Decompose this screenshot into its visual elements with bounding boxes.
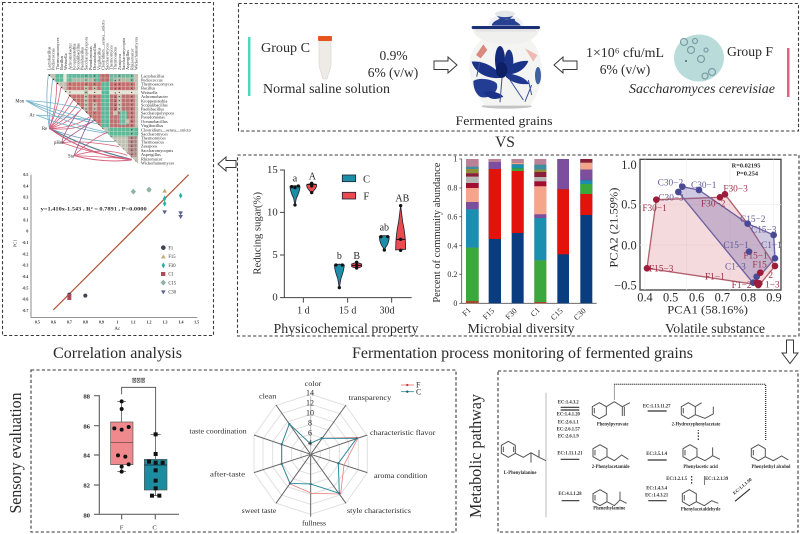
heatmap row labels: Saccharopolyspora xyxy=(141,111,174,116)
chart: sensory radar: 10 xyxy=(306,408,314,417)
chart: community abundance stacked bars: C30 xyxy=(572,306,588,322)
chart: sensory radar: 14 xyxy=(306,388,314,397)
chart: regression scatter plot: 0.5 xyxy=(35,320,40,325)
chart: sensory score box plot xyxy=(83,375,179,531)
chart: community abundance stacked bars: 0.6 xyxy=(447,212,457,221)
group C text: Normal saline solution xyxy=(263,81,390,96)
scatter legend xyxy=(161,245,177,296)
chart: community abundance stacked bars: F15 xyxy=(481,306,496,322)
group C text: Group C xyxy=(261,40,310,55)
label: VS: VS xyxy=(495,134,515,151)
chart: PCA of volatile substances: C1−3 xyxy=(725,262,746,272)
chart: regression scatter plot: 0.8 xyxy=(83,320,88,325)
chart: reducing sugar violins: 30d xyxy=(379,305,394,316)
scatter legend: F1 xyxy=(168,246,174,251)
chart: PCA of volatile substances: R=0.02195 xyxy=(732,162,760,169)
chart: sensory radar: taste coordination xyxy=(189,426,247,435)
chart: reducing sugar violins: AB xyxy=(395,194,410,205)
heatmap row labels: Rhizomucor xyxy=(141,156,163,161)
radar axis labels: sweet taste xyxy=(242,506,277,515)
chart: sensory score box plot: 84 xyxy=(83,453,91,460)
chart: sensory radar: 8 xyxy=(308,418,312,427)
enzyme labels: EC:2.6.1.1 xyxy=(558,420,579,425)
heatmap column labels: Thermomyces xyxy=(109,45,114,70)
network node labels: pHse xyxy=(54,141,64,146)
arrow: to correlation analysis xyxy=(218,157,236,171)
group F dosage text: 6% (v/w) xyxy=(600,62,650,77)
heatmap column labels: Pseudomonas xyxy=(88,46,93,70)
heatmap column labels: Aspergillus xyxy=(125,50,130,70)
arrow: to metabolic pathway xyxy=(782,340,798,364)
enzyme labels: EC:2.6.1.9 xyxy=(558,434,579,439)
heatmap column labels: Bacillus xyxy=(59,55,64,70)
molecule labels: Phenethylamine xyxy=(593,507,625,512)
group C text xyxy=(261,40,418,96)
heatmap column labels: Weissella xyxy=(63,53,68,70)
bar C30 xyxy=(580,159,592,303)
chart: PCA of volatile substances xyxy=(608,158,782,316)
scatter legend: C30 xyxy=(168,291,177,296)
chart: PCA of volatile substances: P=0.254 xyxy=(736,170,759,177)
chart: PCA of volatile substances: F30−2 xyxy=(701,200,726,210)
heatmap column labels: Rhizomucor xyxy=(129,48,134,70)
icon: centrifuge tube xyxy=(318,36,332,79)
molecule labels: Phenylethyl alcohol xyxy=(752,465,791,470)
group F dosage text: 1×10⁶ cfu/mL xyxy=(586,45,664,60)
chart: regression scatter plot: 0.5 xyxy=(23,172,28,177)
panel: experimental groups xyxy=(238,4,798,131)
molecule labels: Phenylacetic acid xyxy=(683,465,718,470)
chart: community abundance stacked bars xyxy=(431,155,597,322)
chart: regression scatter plot: 1.4 xyxy=(178,320,183,325)
violin legend: F xyxy=(363,192,369,203)
chart: regression scatter plot: -0.3 xyxy=(22,263,28,268)
molecules xyxy=(501,402,788,506)
bar C1 xyxy=(534,159,546,303)
chart: regression scatter plot: 0.1 xyxy=(23,217,28,222)
chart: regression scatter plot: 1.5 xyxy=(194,320,199,325)
chart: reducing sugar violins: A xyxy=(309,172,317,183)
chart: regression scatter plot: -0.5 xyxy=(22,285,28,290)
chart: sensory score box plot: 82 xyxy=(83,483,91,490)
chart: PCA of volatile substances: 1.0 xyxy=(621,158,637,172)
group F text: Saccharomyces cerevisiae xyxy=(629,81,775,96)
group F accent bar xyxy=(787,48,790,97)
chart: regression scatter plot: 1.2 xyxy=(146,320,151,325)
heatmap row labels: Thermoascomyces xyxy=(141,82,174,87)
heatmap column labels: Achromobacter xyxy=(67,43,72,70)
chart: PCA of volatile substances: F30−1 xyxy=(642,204,667,214)
group C text: 0.9% xyxy=(379,48,408,63)
chart: PCA of volatile substances: 0.5 xyxy=(621,198,637,212)
chart: regression scatter plot: 1 xyxy=(116,320,118,325)
radar legend: C xyxy=(416,387,421,396)
heatmap row labels: Wickerhamomyces xyxy=(141,160,175,165)
chart: PCA of volatile substances: 0.6 xyxy=(689,291,704,305)
enzyme labels: EC:2.6.1.57 xyxy=(557,427,581,432)
chart: reducing sugar violins xyxy=(251,165,412,316)
enzyme labels: EC:1.4.3.2 xyxy=(558,400,579,405)
heatmap cell grid xyxy=(47,74,138,164)
heatmap row labels: Paenibacillus xyxy=(141,106,164,111)
heading: metabolic pathway: Metabolic pathway xyxy=(466,394,485,518)
chart: PCA of volatile substances: 0.5 xyxy=(663,291,678,305)
heatmap row labels xyxy=(141,73,191,165)
chart: PCA of volatile substances: PCA1 (58.16%) xyxy=(667,303,748,316)
violin legend: C xyxy=(363,174,370,185)
heatmap row labels: Bacillus xyxy=(141,86,155,91)
heatmap row labels: Kroppenstedtia xyxy=(141,98,168,103)
enzyme labels xyxy=(557,400,754,498)
heatmap row labels: Scopulibacillus xyxy=(141,102,168,107)
icon: yeast under microscope xyxy=(674,34,724,82)
chart: sensory radar xyxy=(189,379,436,528)
group F dosage text xyxy=(586,45,664,77)
enzyme labels: EC:1.2.1.39 xyxy=(705,477,729,482)
heatmap column labels: Saccharopolyspora xyxy=(84,37,89,70)
chart: sensory score box plot: F xyxy=(120,524,124,531)
heading: volatile substance: Volatile substance xyxy=(665,322,765,337)
radar axis labels: style characteristics xyxy=(347,506,411,515)
chart: community abundance stacked bars: C15 xyxy=(549,306,565,322)
bar F1 xyxy=(466,159,479,303)
heatmap column labels: Virgibacillus xyxy=(96,47,101,70)
panel: correlation analysis xyxy=(2,2,214,336)
chart: reducing sugar violins: b xyxy=(337,251,342,262)
chart: PCA of volatile substances: 0.9 xyxy=(766,291,782,305)
chart: PCA of volatile substances: C30−3 xyxy=(658,194,684,204)
heatmap row labels: Pseudomonas xyxy=(141,115,165,120)
radar axis labels: color xyxy=(305,379,322,388)
heatmap column labels xyxy=(47,20,138,70)
heatmap column labels: Clostridium__sensu__stricto xyxy=(100,20,105,70)
heatmap column labels: Pediococcus xyxy=(51,48,56,70)
group F text: Group F xyxy=(727,44,773,59)
chart: regression scatter plot: 0.3 xyxy=(23,195,28,200)
chart: regression scatter plot: 0 xyxy=(26,229,28,234)
chart: sensory radar: 4 xyxy=(308,438,312,447)
chart: community abundance stacked bars: 0.2 xyxy=(447,270,457,279)
chart: reducing sugar violins: 1 d xyxy=(297,305,310,316)
enzyme labels: EC:3.5.1.4 xyxy=(646,452,668,457)
chart: PCA of volatile substances: C30−1 xyxy=(691,181,717,191)
heading: microbial diversity: Microbial diversity xyxy=(468,322,574,337)
molecule labels: Phenylacetaldehyde xyxy=(681,508,720,513)
heatmap column labels: Lactobacillus xyxy=(47,46,52,70)
heatmap column labels: Zeaspora xyxy=(117,54,122,70)
heatmap row labels: Clostridium__sensu__stricto xyxy=(141,127,191,132)
chart: reducing sugar violins: 15 xyxy=(267,165,278,176)
network node labels: Ac xyxy=(29,114,35,119)
chart: PCA of volatile substances: 0.7 xyxy=(715,291,730,305)
molecule labels: 2-Hydroxyphenylacetate xyxy=(672,422,720,427)
heatmap row labels: Saccharomycopsis xyxy=(141,148,174,153)
chart: community abundance stacked bars: 0.4 xyxy=(447,241,457,250)
group C text: 6% (v/w) xyxy=(368,65,418,80)
heatmap row labels: Thermomyces xyxy=(141,135,166,140)
chart: PCA of volatile substances: C30−2 xyxy=(658,178,683,188)
significance dots xyxy=(70,75,132,160)
radar legend xyxy=(401,381,421,396)
radar axis labels: clean xyxy=(259,391,277,400)
scatter legend: C1 xyxy=(168,273,174,278)
chart: sensory score box plot: 88 xyxy=(83,393,91,400)
heatmap row labels: Pediococcus xyxy=(141,77,163,82)
chart: regression scatter plot: 0.6 xyxy=(51,320,56,325)
heatmap row labels: Saccharomyces xyxy=(141,131,168,136)
chart: regression scatter plot: 1.3 xyxy=(162,320,167,325)
heatmap column labels: Oceanobacillus xyxy=(92,43,97,70)
chart: regression scatter plot: -0.6 xyxy=(22,297,28,302)
chart: PCA of volatile substances: C1−1 xyxy=(761,241,782,251)
panel: metabolic pathway xyxy=(498,371,798,532)
divider xyxy=(544,393,547,517)
chart: PCA of volatile substances: F15 xyxy=(752,260,767,270)
chart: reducing sugar violins: 15 d xyxy=(339,305,356,316)
chart: PCA of volatile substances: PCA2 (21.59%) xyxy=(608,188,621,268)
radar axis labels: characteristic flavor xyxy=(370,428,436,437)
molecule labels xyxy=(504,422,791,513)
chart: PCA of volatile substances: 2 xyxy=(768,271,773,281)
reaction arrows xyxy=(561,407,750,501)
heatmap row labels: Aspergillus xyxy=(141,152,161,157)
enzyme labels: EC:1.13.11.27 xyxy=(643,404,671,409)
chart: regression scatter plot: 1.1 xyxy=(131,320,136,325)
chart: correlation heatmap with network xyxy=(15,20,191,165)
chart: community abundance stacked bars: 0.8 xyxy=(447,184,457,193)
scatter legend: C15 xyxy=(168,281,177,286)
heading: fermentation process monitoring: Fermentation process monitoring of fermented grains xyxy=(352,345,693,362)
chart: regression scatter plot: -0.2 xyxy=(22,251,28,256)
box C xyxy=(144,432,167,498)
heatmap row labels: Achromobacter xyxy=(141,94,168,99)
heading: physicochemical property: Physicochemical property xyxy=(274,322,418,337)
chart: reducing sugar violins: ab xyxy=(380,223,389,234)
chart: sensory score box plot: 80 xyxy=(83,513,91,520)
chart: regression scatter plot: Ac xyxy=(114,327,121,332)
radar axis labels: transparency xyxy=(349,393,391,402)
chart: PCA of volatile substances: 0.0 xyxy=(621,238,637,252)
chart: reducing sugar violins: 10 xyxy=(267,207,278,218)
molecule labels: Phenylpyruvate xyxy=(597,422,628,427)
radar axis labels: aroma condition xyxy=(374,471,427,480)
network node labels xyxy=(15,99,74,159)
enzyme labels: EC:1.4.3.4 xyxy=(646,486,668,491)
chart: sensory radar: 12 xyxy=(306,398,314,407)
chart: regression scatter plot: -0.1 xyxy=(22,240,28,245)
enzyme labels: EC:1.2.1.5 xyxy=(666,477,688,482)
group C accent bar xyxy=(248,37,250,96)
heatmap row labels: Zeaspora xyxy=(141,144,157,149)
chart: community abundance stacked bars: C1 xyxy=(529,306,542,319)
bar C15 xyxy=(557,159,569,303)
chart: PCA of volatile substances: 1−3 xyxy=(765,280,780,290)
network node labels: Sta xyxy=(68,154,74,159)
arrow: saline into grains xyxy=(434,57,457,73)
enzyme labels: EC:1.11.1.21 xyxy=(557,451,583,456)
chart: PCA of volatile substances: F1−2 xyxy=(732,281,752,291)
chart: reducing sugar violins: 5 xyxy=(272,250,278,261)
heatmap column labels: Paenibacillus xyxy=(80,47,85,70)
enzyme labels: EC:1.4.1.20 xyxy=(557,413,581,418)
chart: reducing sugar violins: B xyxy=(353,251,360,262)
heatmap row labels: Lactobacillus xyxy=(141,73,165,78)
chart: regression scatter plot: 0.4 xyxy=(23,183,28,188)
heatmap column labels: Scopulibacillus xyxy=(76,43,81,70)
network links xyxy=(26,75,132,161)
arrow: yeast into grains xyxy=(554,57,577,73)
chart: community abundance stacked bars: F30 xyxy=(504,306,519,322)
box F xyxy=(111,399,133,474)
heading: correlation analysis: Correlation analysis xyxy=(53,345,182,362)
chart: sensory score box plot: C xyxy=(152,524,157,531)
chart: PCA of volatile substances: −0.5 xyxy=(614,278,637,292)
chart: sensory radar: after-taste xyxy=(210,469,246,478)
heatmap column labels: Kroppenstedtia xyxy=(71,43,76,70)
dotted feedback link xyxy=(613,384,616,400)
chart: reducing sugar violins: Reducing sugar(%) xyxy=(251,192,263,275)
chart: PCA of volatile substances: F15−3 xyxy=(649,264,674,274)
chart: sensory score box plot: ⊠⊠⊠ xyxy=(132,375,145,384)
chart: regression scatter plot: y=1.410x-1.543 , R² = 0.7891 , P=0.0000 xyxy=(41,207,147,213)
chart: community abundance stacked bars: 0 xyxy=(453,299,457,308)
network node labels: Mon xyxy=(15,99,25,104)
chart: regression scatter plot: 0.9 xyxy=(99,320,104,325)
bar F30 xyxy=(512,159,524,303)
heatmap row labels: Weissella xyxy=(141,90,158,95)
heading: sensory evaluation: Sensory evaluation xyxy=(6,392,25,514)
panel: sensory evaluation xyxy=(31,370,456,532)
chart: PCA of volatile substances: 0.4 xyxy=(637,291,653,305)
chart: reducing sugar violins: 0 xyxy=(272,293,278,304)
chart: PCA of volatile substances: C15−1 xyxy=(723,241,749,251)
heatmap row labels: Thermoascus xyxy=(141,140,164,145)
chart: sensory radar: 6 xyxy=(308,428,312,437)
radar axis labels xyxy=(242,379,436,528)
chart: regression scatter plot: -0.7 xyxy=(22,308,28,313)
scatter legend: F15 xyxy=(168,255,176,260)
network node labels: Re xyxy=(42,127,47,132)
molecule labels: L-Phenylalanine xyxy=(504,471,536,476)
chart: PCA of volatile substances: F1−1 xyxy=(705,272,725,282)
chart: reducing sugar violins: a xyxy=(293,173,298,184)
chart: regression scatter plot: 0.2 xyxy=(23,206,28,211)
heatmap column labels: Saccharomycopsis xyxy=(121,37,126,70)
chart: regression scatter plot: PC1 xyxy=(13,240,18,247)
enzyme labels: EC:1.1.1.90 xyxy=(733,477,754,496)
heatmap column labels: Wickerhamomyces xyxy=(133,36,138,70)
chart: PCA of volatile substances: F15−1 xyxy=(743,252,768,262)
panel: fermentation monitoring xyxy=(238,155,799,337)
group F text xyxy=(629,44,775,96)
heatmap column labels: Thermoascus xyxy=(113,47,118,70)
chart: community abundance stacked bars: 1 xyxy=(453,155,457,164)
chart: PCA of volatile substances: F30−3 xyxy=(723,184,748,194)
chart: PCA of volatile substances: 0.8 xyxy=(741,291,756,305)
chart: regression scatter plot: -0.4 xyxy=(22,274,28,279)
enzyme labels: EC:1.4.3.21 xyxy=(645,493,669,498)
chart: PCA of volatile substances: C15−2 xyxy=(740,215,766,225)
heatmap column labels: Thermoascomyces xyxy=(55,37,60,70)
chart: PCA of volatile substances: C15−3 xyxy=(751,226,777,236)
heatmap row labels: Virgibacillus xyxy=(141,123,164,128)
chart: community abundance stacked bars: Percent of community abundance xyxy=(431,163,443,303)
heatmap row labels: Oceanobacillus xyxy=(141,119,168,124)
chart: community abundance stacked bars: F1 xyxy=(460,306,473,318)
chart: regression scatter plot xyxy=(13,172,199,332)
icon: fermentation jar xyxy=(469,11,542,109)
label: fermented grains: Fermented grains xyxy=(456,113,552,128)
radar axis labels: fullness xyxy=(302,519,326,528)
chart: regression scatter plot: 0.7 xyxy=(67,320,72,325)
chart: sensory score box plot: 86 xyxy=(83,423,91,430)
violin legend xyxy=(342,174,370,203)
bar F15 xyxy=(489,159,501,303)
enzyme labels: EC:4.1.1.28 xyxy=(558,492,582,497)
heatmap column labels: Saccharomyces xyxy=(104,43,109,70)
molecule labels: 2-Phenylacetamide xyxy=(592,465,630,470)
scatter legend: F30 xyxy=(168,264,176,269)
radar legend: F xyxy=(416,381,421,390)
